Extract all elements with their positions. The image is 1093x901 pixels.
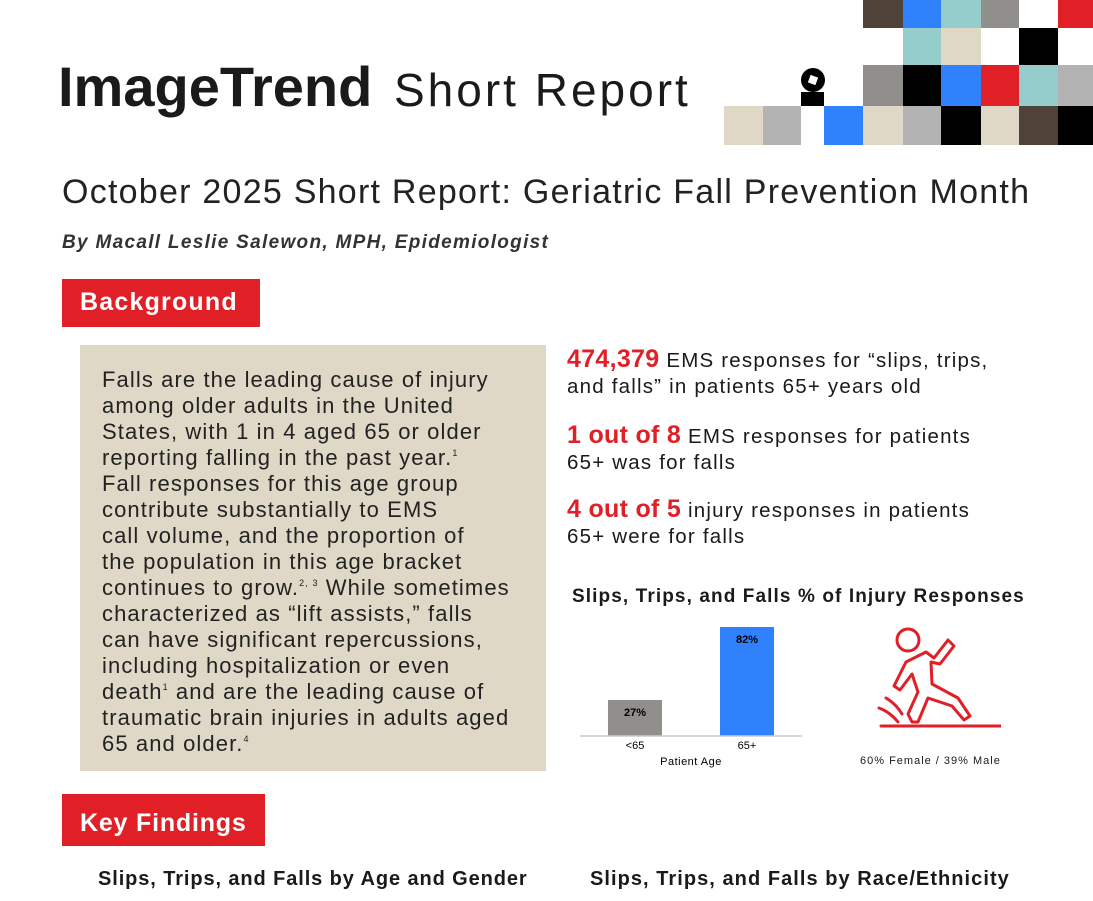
chart title: Slips, Trips, and Falls % of Injury Responses <box>572 586 1025 607</box>
report title: October 2025 Short Report: Geriatric Fall Prevention Month <box>62 173 1030 211</box>
bar chart: patient age: 65+ <box>738 740 756 752</box>
panel: background text: Fall responses for this age group <box>102 471 459 496</box>
panel: background text: the population in this age bracket <box>102 549 462 574</box>
bar chart: patient age: 27% <box>624 707 646 719</box>
panel: background text: reporting falling in the past year.1 <box>102 445 458 470</box>
stat: 1 out of 8: 1 out of 8 EMS responses for patients <box>567 421 971 449</box>
panel: background text: continues to grow.2, 3 While sometimes <box>102 575 510 600</box>
section header: Key Findings: Key Findings <box>80 809 247 837</box>
bar chart: patient age <box>580 627 802 768</box>
caption: gender split: 60% Female / 39% Male <box>860 755 1001 767</box>
logo: ImageTrend: ImageTrend <box>58 55 372 118</box>
subheading: age and gender: Slips, Trips, and Falls by Age and Gender <box>98 868 528 890</box>
stat: 4 out of 5: 65+ were for falls <box>567 525 745 548</box>
pixel mosaic decoration <box>724 0 1093 145</box>
panel: background text: States, with 1 in 4 aged 65 or older <box>102 419 482 444</box>
stat: 1 out of 8 <box>567 421 971 474</box>
panel: background text: Falls are the leading cause of injury <box>102 367 489 392</box>
bar chart: patient age: Patient Age <box>660 756 722 768</box>
panel: background text: 65 and older.4 <box>102 731 250 756</box>
panel: background text: among older adults in the United <box>102 393 454 418</box>
stat: 4 out of 5 <box>567 495 970 548</box>
subheading: race/ethnicity: Slips, Trips, and Falls by Race/Ethnicity <box>590 868 1010 890</box>
bar chart: patient age: <65 <box>626 740 644 752</box>
author byline: By Macall Leslie Salewon, MPH, Epidemiologist <box>62 232 549 253</box>
stat: 474,379: 474,379 EMS responses for “slips, trips, <box>567 345 988 373</box>
icon: person slipping <box>878 628 1001 728</box>
section header: Key Findings <box>62 794 265 846</box>
heading: Short Report: Short Report <box>394 64 691 116</box>
section header: Background <box>62 279 260 327</box>
bar chart: patient age: 82% <box>736 634 758 646</box>
panel: background text <box>80 345 546 771</box>
section header: Background: Background <box>80 288 238 316</box>
panel: background text: death1 and are the leading cause of <box>102 679 484 704</box>
stat: 4 out of 5: 4 out of 5 injury responses in patients <box>567 495 970 523</box>
panel: background text: including hospitalization or even <box>102 653 450 678</box>
panel: background text: contribute substantially to EMS <box>102 497 438 522</box>
panel: background text: can have significant repercussions, <box>102 627 483 652</box>
stat: 474,379: and falls” in patients 65+ years old <box>567 375 922 398</box>
panel: background text: traumatic brain injuries in adults aged <box>102 705 509 730</box>
panel: background text: characterized as “lift assists,” falls <box>102 601 473 626</box>
panel: background text: call volume, and the proportion of <box>102 523 465 548</box>
stat: 474,379 <box>567 345 988 398</box>
stat: 1 out of 8: 65+ was for falls <box>567 451 736 474</box>
